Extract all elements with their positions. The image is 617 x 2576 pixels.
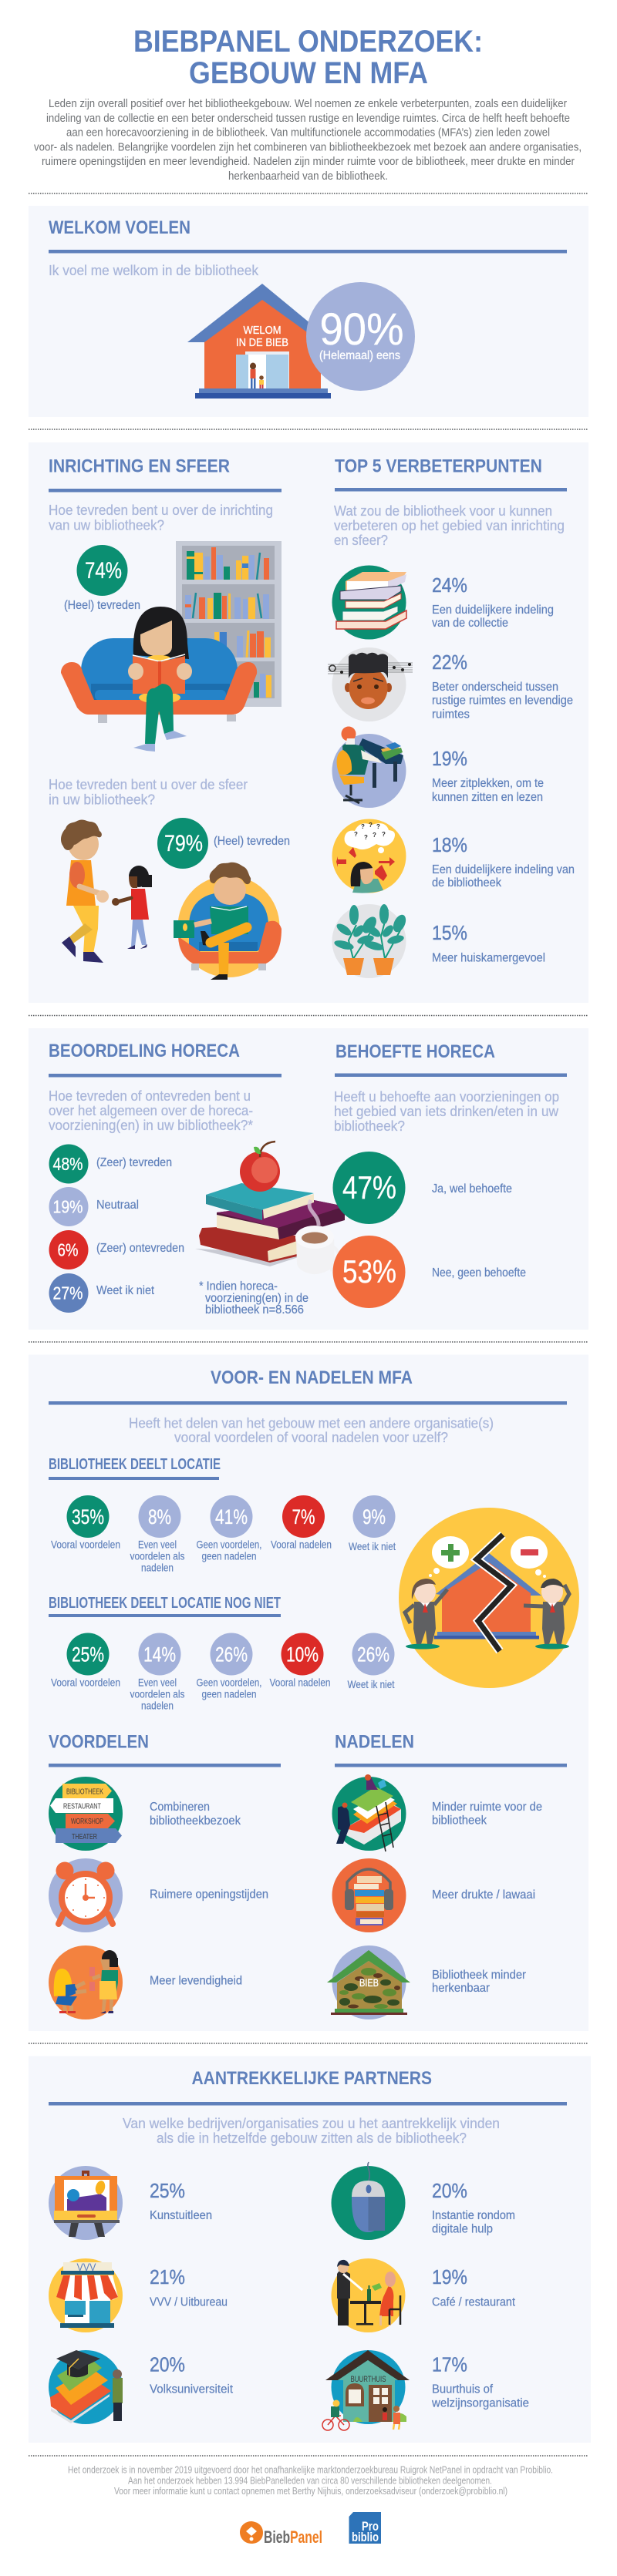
item: 15 percent living room: Meer huiskamergevoel bbox=[432, 951, 545, 965]
item: 18 percent layout: Een duidelijkere indeling van bbox=[432, 863, 575, 876]
stats row: deelt locatie: Weet ik niet bbox=[349, 1540, 396, 1552]
stat: 47 percent bbox=[333, 1152, 512, 1224]
stat: 6 percent: (Zeer) ontevreden bbox=[96, 1242, 184, 1255]
stats row: deelt locatie nog niet: nadelen bbox=[141, 1699, 174, 1711]
stat: 90 percent bbox=[306, 282, 415, 391]
stats row: deelt locatie nog niet: 10% bbox=[286, 1643, 319, 1666]
item: 19 percent seating: Meer zitplekken, om te bbox=[432, 777, 544, 790]
question: inrichting: van uw bibliotheek? bbox=[49, 518, 164, 533]
item: combineren bibliotheekbezoek: THEATER bbox=[72, 1833, 97, 1841]
stats row: deelt locatie: geen nadelen bbox=[202, 1549, 256, 1562]
stat: 6 percent bbox=[49, 1230, 184, 1270]
stat: 19 percent: 19% bbox=[52, 1196, 83, 1216]
item: volksuniversiteit bbox=[49, 2350, 234, 2424]
stats row: deelt locatie: Vooral nadelen bbox=[271, 1539, 332, 1551]
illustration: man reading in armchair bbox=[174, 863, 282, 980]
question: top 5: en sfeer? bbox=[334, 533, 388, 548]
panel: inrichting en sfeer + top 5 bbox=[29, 442, 588, 1003]
stats row: deelt locatie nog niet: 25% bbox=[72, 1643, 104, 1666]
item: 18 percent layout bbox=[332, 819, 575, 893]
stat: 79 percent: 79% bbox=[164, 831, 203, 856]
panel: welkom voelen bbox=[29, 206, 588, 417]
item: meer levendigheid bbox=[49, 1945, 242, 2019]
question: top 5: Wat zou de bibliotheek voor u kunnen bbox=[334, 503, 552, 519]
title: BIEBPANEL ONDERZOEK: bbox=[133, 25, 483, 59]
item: minder herkenbaar bbox=[327, 1945, 527, 2019]
question: top 5 bbox=[334, 503, 565, 548]
item: 18 percent layout: ? bbox=[376, 823, 380, 830]
stats row: deelt locatie: Vooral voordelen bbox=[51, 1539, 120, 1551]
item: 22 percent quiet and lively: ruimtes bbox=[432, 708, 470, 721]
heading: nadelen: NADELEN bbox=[335, 1731, 414, 1753]
item: digitale hulp: 20% bbox=[432, 2179, 467, 2202]
stat: 90 percent: (Helemaal) eens bbox=[319, 349, 400, 362]
stats row: deelt locatie: Even veel bbox=[138, 1539, 177, 1551]
stat: 48 percent: 48% bbox=[52, 1154, 83, 1174]
item: combineren bibliotheekbezoek: RESTAURANT bbox=[63, 1802, 101, 1811]
stats row: deelt locatie: voordelen als bbox=[130, 1549, 185, 1562]
item: 18 percent layout: ? bbox=[354, 831, 358, 838]
item: combineren bibliotheekbezoek bbox=[49, 1777, 241, 1851]
item: buurthuis: Buurthuis of bbox=[432, 2383, 494, 2396]
question: beoordeling: over het algemeen over de horeca- bbox=[49, 1103, 253, 1118]
stats row: deelt locatie nog niet: Vooral voordelen bbox=[51, 1676, 120, 1688]
question: beoordeling: voorziening(en) in uw bibliotheek?* bbox=[49, 1118, 253, 1133]
title: GEBOUW EN MFA bbox=[189, 56, 428, 90]
question: beoordeling bbox=[49, 1088, 253, 1133]
item: 19 percent seating: 19% bbox=[432, 747, 467, 770]
intro text bbox=[34, 98, 582, 183]
question: partners: als die in hetzelfde gebouw zitten als de bibliotheek? bbox=[157, 2130, 467, 2146]
question: inrichting: Hoe tevreden bent u over de inrichting bbox=[49, 503, 273, 518]
stats row: deelt locatie: 35% bbox=[72, 1505, 104, 1528]
item: combineren bibliotheekbezoek: bibliotheekbezoek bbox=[150, 1814, 241, 1828]
stat: 27 percent bbox=[49, 1273, 154, 1313]
icon: library house: IN DE BIEB bbox=[236, 337, 288, 349]
item: 22 percent quiet and lively: 22% bbox=[432, 651, 467, 674]
item: minder ruimte: Minder ruimte voor de bbox=[432, 1801, 542, 1814]
stats row: deelt locatie nog niet: geen nadelen bbox=[202, 1688, 256, 1700]
item: combineren bibliotheekbezoek: WORKSHOP bbox=[71, 1818, 103, 1826]
heading: top 5 verbeterpunten: TOP 5 VERBETERPUNTEN bbox=[335, 456, 542, 476]
item: 18 percent layout: ? bbox=[361, 823, 365, 830]
item: kunstuitleen bbox=[49, 2166, 212, 2240]
item: minder herkenbaar: herkenbaar bbox=[432, 1982, 491, 1995]
stats row: deelt locatie nog niet: 14% bbox=[143, 1643, 176, 1666]
subheading: deelt locatie nog niet bbox=[49, 1595, 281, 1617]
item: 18 percent layout: ? bbox=[364, 834, 368, 841]
heading: voordelen: VOORDELEN bbox=[49, 1731, 149, 1753]
item: 24 percent collection: Een duidelijkere indeling bbox=[432, 604, 554, 617]
item: minder ruimte: bibliotheek bbox=[432, 1814, 487, 1827]
stat: 79 percent bbox=[157, 818, 290, 869]
footnote bbox=[199, 1280, 308, 1317]
intro text: indeling van de collectie en een beter onderscheid tussen rustige en levendige ruimtes. Circa de helft heeft behoefte bbox=[46, 113, 570, 125]
item: 15 percent living room bbox=[332, 904, 545, 978]
item: minder ruimte bbox=[332, 1774, 542, 1851]
item: buurthuis: BUURTHUIS bbox=[350, 2375, 386, 2384]
heading: welkom voelen: WELKOM VOELEN bbox=[49, 217, 190, 238]
item: buurthuis: welzijnsorganisatie bbox=[431, 2397, 529, 2410]
stats row: deelt locatie: 8% bbox=[148, 1505, 171, 1528]
item: cafe restaurant: 19% bbox=[432, 2265, 467, 2288]
stat: 47 percent: 47% bbox=[342, 1169, 396, 1206]
item: minder herkenbaar: BIEB bbox=[359, 1976, 379, 1989]
intro text: ruimere openingstijden en meer levendigheid. Nadelen zijn minder ruimte voor de bibliotheek, meer drukte en minder bbox=[42, 156, 575, 168]
question: inrichting bbox=[49, 503, 273, 533]
question: behoefte: het gebied van iets drinken/eten in uw bbox=[334, 1104, 559, 1119]
panel: voor- en nadelen mfa bbox=[29, 1355, 588, 2031]
question: mfa bbox=[129, 1415, 494, 1445]
item: combineren bibliotheekbezoek: BIBLIOTHEEK bbox=[66, 1788, 103, 1796]
item: volksuniversiteit: Volksuniversiteit bbox=[150, 2383, 234, 2396]
stat: 27 percent: Weet ik niet bbox=[96, 1284, 154, 1297]
item: ruimere openingstijden: Ruimere openingstijden bbox=[150, 1888, 268, 1901]
intro text: Leden zijn overall positief over het bibliotheekgebouw. Wel noemen ze enkele verbeterpunten, zoals een duidelijker bbox=[49, 98, 567, 110]
footer text: Voor meer informatie kunt u contact opnemen met Berthy Nijhuis, onderzoeksadviseur (onderzoek@probiblio.nl) bbox=[114, 2486, 507, 2497]
question: behoefte: Heeft u behoefte aan voorzieningen op bbox=[334, 1089, 559, 1105]
stat: 48 percent: (Zeer) tevreden bbox=[96, 1156, 172, 1169]
heading: inrichting en sfeer: INRICHTING EN SFEER bbox=[49, 456, 230, 476]
stats row: deelt locatie bbox=[51, 1495, 396, 1574]
stat: 74 percent bbox=[64, 545, 140, 612]
stats row: deelt locatie: Geen voordelen, bbox=[196, 1539, 262, 1551]
illustration: man and child bbox=[61, 819, 152, 963]
item: vvv uitbureau: 21% bbox=[150, 2265, 185, 2288]
item: 18 percent layout: ? bbox=[369, 822, 373, 829]
subheading: deelt locatie nog niet: BIBLIOTHEEK DEELT LOCATIE NOG NIET bbox=[49, 1595, 281, 1612]
panel: horeca bbox=[29, 1028, 588, 1330]
item: cafe restaurant: Café / restaurant bbox=[432, 2295, 516, 2309]
heading: aantrekkelijke partners: AANTREKKELIJKE PARTNERS bbox=[191, 2068, 432, 2089]
stats row: deelt locatie nog niet bbox=[51, 1633, 395, 1711]
stats row: deelt locatie nog niet: voordelen als bbox=[130, 1688, 185, 1700]
item: vvv uitbureau: VVV bbox=[77, 2261, 96, 2273]
stat: 19 percent: Neutraal bbox=[96, 1199, 139, 1212]
item: buurthuis: 17% bbox=[432, 2352, 467, 2376]
item: vvv uitbureau bbox=[49, 2258, 228, 2332]
item: meer levendigheid: Meer levendigheid bbox=[150, 1975, 242, 1987]
item: 22 percent quiet and lively: Beter onderscheid tussen bbox=[432, 681, 558, 694]
footer text: Aan het onderzoek hebben 13.994 BiebPanelleden van circa 80 verschillende bibliotheken deelgenomen. bbox=[128, 2476, 492, 2487]
question: sfeer bbox=[49, 777, 248, 808]
item: kunstuitleen: Kunstuitleen bbox=[150, 2209, 212, 2222]
stats row: deelt locatie: 41% bbox=[215, 1505, 248, 1528]
stat: 74 percent: 74% bbox=[85, 558, 122, 583]
stats row: deelt locatie: 7% bbox=[292, 1505, 315, 1528]
stats row: deelt locatie nog niet: Vooral nadelen bbox=[270, 1676, 330, 1688]
illustration: woman reading on sofa bbox=[61, 607, 257, 752]
stat: 53 percent: 53% bbox=[342, 1253, 396, 1290]
intro text: aan een horecavoorziening in de bibliotheek. Van multifunctionele accommodaties (MFA’s) zien leden zowel bbox=[66, 126, 550, 139]
heading: voor- en nadelen mfa: VOOR- EN NADELEN MFA bbox=[211, 1367, 413, 1388]
item: kunstuitleen: 25% bbox=[150, 2179, 185, 2202]
item: ruimere openingstijden bbox=[49, 1858, 268, 1932]
panel: aantrekkelijke partners bbox=[29, 2056, 591, 2443]
question: welkom: Ik voel me welkom in de bibliotheek bbox=[49, 263, 259, 278]
item: 24 percent collection bbox=[332, 566, 554, 640]
item: volksuniversiteit: 20% bbox=[150, 2352, 185, 2376]
question: top 5: verbeteren op het gebied van inrichting bbox=[334, 518, 565, 533]
question: mfa: vooral voordelen of vooral nadelen voor uzelf? bbox=[174, 1430, 448, 1445]
item: 19 percent seating: kunnen zitten en lezen bbox=[432, 791, 543, 804]
item: meer drukte bbox=[332, 1858, 535, 1932]
question: beoordeling: Hoe tevreden of ontevreden bent u bbox=[49, 1088, 251, 1104]
item: 18 percent layout: 18% bbox=[432, 833, 467, 856]
footnote: bibliotheek n=8.566 bbox=[205, 1303, 304, 1317]
stats row: deelt locatie nog niet: Geen voordelen, bbox=[196, 1676, 262, 1688]
footer text bbox=[68, 2465, 553, 2497]
question: behoefte: bibliotheek? bbox=[334, 1118, 405, 1134]
stat: 79 percent: (Heel) tevreden bbox=[214, 835, 290, 848]
item: 15 percent living room: 15% bbox=[432, 921, 467, 944]
item: cafe restaurant bbox=[332, 2258, 516, 2332]
stats row: deelt locatie nog niet: 26% bbox=[215, 1643, 248, 1666]
stat: 6 percent: 6% bbox=[57, 1239, 79, 1259]
stat: 53 percent: Nee, geen behoefte bbox=[432, 1266, 526, 1280]
heading: behoefte horeca: BEHOEFTE HORECA bbox=[335, 1041, 495, 1062]
item: 18 percent layout: ? bbox=[373, 832, 376, 839]
footnote: voorziening(en) in de bbox=[205, 1292, 308, 1305]
question: sfeer: Hoe tevreden bent u over de sfeer bbox=[49, 777, 248, 792]
stat: 48 percent bbox=[49, 1144, 172, 1184]
question: mfa: Heeft het delen van het gebouw met een andere organisatie(s) bbox=[129, 1415, 494, 1431]
item: digitale hulp bbox=[332, 2162, 515, 2240]
intro text: herkenbaarheid van de bibliotheek. bbox=[228, 170, 388, 183]
heading: beoordeling horeca: BEOORDELING HORECA bbox=[49, 1041, 240, 1061]
question: partners: Van welke bedrijven/organisaties zou u het aantrekkelijk vinden bbox=[123, 2116, 500, 2131]
illustration: apple, books and coffee bbox=[195, 1142, 345, 1274]
illustration: bookshelf bbox=[176, 541, 282, 707]
question: partners bbox=[123, 2116, 500, 2146]
stat: 53 percent bbox=[333, 1236, 526, 1308]
stats row: deelt locatie nog niet: 26% bbox=[357, 1643, 389, 1666]
stats row: deelt locatie nog niet: Weet ik niet bbox=[347, 1678, 395, 1690]
logo: probiblio bbox=[349, 2512, 381, 2544]
title bbox=[133, 25, 483, 90]
stat: 47 percent: Ja, wel behoefte bbox=[432, 1182, 512, 1196]
icon: library house: WELOM bbox=[244, 325, 281, 337]
footnote: * Indien horeca- bbox=[199, 1280, 278, 1293]
stats row: deelt locatie: nadelen bbox=[141, 1562, 174, 1574]
icon: library house bbox=[187, 284, 331, 399]
question: behoefte bbox=[334, 1089, 559, 1134]
item: digitale hulp: Instantie rondom bbox=[432, 2209, 515, 2222]
item: minder herkenbaar: Bibliotheek minder bbox=[432, 1969, 527, 1982]
item: 24 percent collection: 24% bbox=[432, 573, 467, 597]
intro text: voor- als nadelen. Belangrijke voordelen zijn het combineren van bibliotheekbezoek met bezoek aan andere organisaties, bbox=[34, 142, 582, 154]
item: 19 percent seating bbox=[332, 726, 544, 808]
item: meer drukte: Meer drukte / lawaai bbox=[432, 1888, 535, 1902]
item: 18 percent layout: de bibliotheek bbox=[432, 876, 502, 889]
item: 22 percent quiet and lively: rustige ruimtes en levendige bbox=[432, 694, 573, 708]
subheading: deelt locatie: BIBLIOTHEEK DEELT LOCATIE bbox=[49, 1456, 221, 1473]
item: 24 percent collection: van de collectie bbox=[432, 617, 508, 630]
item: vvv uitbureau: VVV / Uitbureau bbox=[150, 2295, 228, 2309]
item: combineren bibliotheekbezoek: Combineren bbox=[150, 1801, 210, 1814]
stat: 27 percent: 27% bbox=[52, 1283, 83, 1303]
logo: biebpanel: BiebPanel bbox=[264, 2527, 322, 2547]
subheading: deelt locatie bbox=[49, 1456, 221, 1480]
illustration: split house with two men bbox=[399, 1508, 579, 1688]
stat: 90 percent: 90% bbox=[319, 304, 404, 355]
question: sfeer: in uw bibliotheek? bbox=[49, 792, 155, 808]
item: buurthuis bbox=[322, 2350, 529, 2430]
stat: 19 percent bbox=[49, 1187, 139, 1226]
logo: probiblio: biblio bbox=[352, 2530, 379, 2544]
stats row: deelt locatie: 9% bbox=[362, 1505, 386, 1528]
stats row: deelt locatie nog niet: Even veel bbox=[138, 1676, 177, 1688]
item: 18 percent layout: ? bbox=[382, 831, 386, 838]
item: 22 percent quiet and lively bbox=[328, 647, 573, 721]
stat: 74 percent: (Heel) tevreden bbox=[64, 599, 140, 612]
item: digitale hulp: digitale hulp bbox=[432, 2223, 493, 2235]
logo: biebpanel bbox=[240, 2521, 322, 2547]
logo: probiblio: Pro bbox=[362, 2519, 379, 2534]
